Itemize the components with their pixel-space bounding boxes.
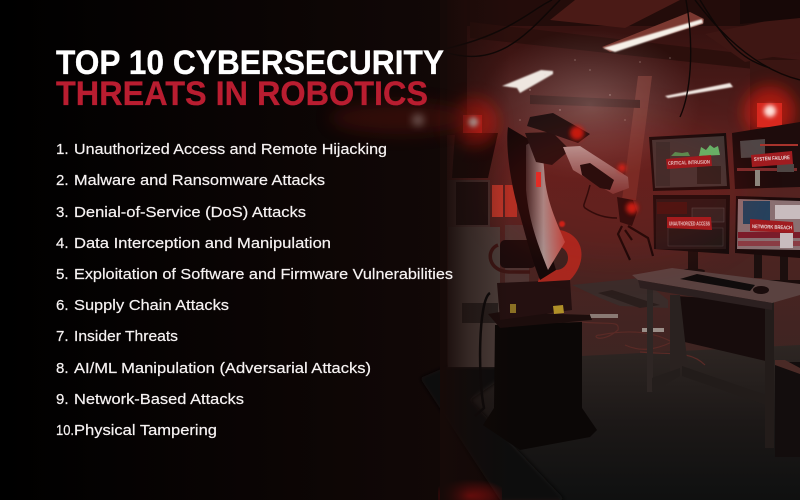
- red ambient glow: [490, 120, 750, 260]
- title line 1: TOP 10 CYBERSECURITY: [56, 44, 444, 82]
- item 2: 2.: [56, 172, 69, 189]
- monitors: [649, 122, 800, 287]
- item 2: Malware and Ransomware Attacks: [74, 172, 325, 189]
- item 1: Unauthorized Access and Remote Hijacking: [74, 141, 387, 158]
- pedestal: [483, 312, 597, 450]
- title: [56, 44, 444, 113]
- ceiling beams: [447, 0, 800, 200]
- item 6: Supply Chain Attacks: [74, 297, 229, 314]
- cables: [440, 0, 800, 117]
- cable: [475, 293, 490, 416]
- item 10: 10.: [56, 422, 74, 439]
- haze: [480, 30, 700, 180]
- monitor: system failure: [732, 122, 800, 189]
- item 4: Data Interception and Manipulation: [74, 235, 331, 252]
- wall panels left of robot: [447, 133, 529, 367]
- item 7: 7.: [56, 328, 69, 345]
- blurred ghost light: [330, 102, 470, 134]
- item 5: Exploitation of Software and Firmware Vulnerabilities: [74, 266, 453, 283]
- motor: [490, 240, 536, 272]
- wrist: [617, 197, 637, 226]
- left fade: [440, 0, 510, 500]
- robot arm: [475, 113, 653, 450]
- monitor: critical intrusion: CRITICAL INTRUSION: [668, 160, 710, 167]
- item 3: 3.: [56, 204, 69, 221]
- item 3: Denial-of-Service (DoS) Attacks: [74, 204, 306, 221]
- item 1: 1.: [56, 141, 69, 158]
- dust: [519, 57, 671, 121]
- item 9: Network-Based Attacks: [74, 391, 244, 408]
- monitor: unauthorized access: UNAUTHORIZED ACCESS: [669, 222, 710, 228]
- upper arm: [563, 146, 629, 194]
- desk: [632, 268, 800, 457]
- item 9: 9.: [56, 391, 69, 408]
- arm hose: [584, 185, 617, 218]
- item 6: 6.: [56, 297, 69, 314]
- item 7: Insider Threats: [74, 328, 178, 345]
- floor edge: [420, 366, 565, 500]
- red beacons: [449, 86, 796, 146]
- elbow joint: [538, 230, 581, 282]
- item 5: 5.: [56, 266, 69, 283]
- threat list: [56, 141, 453, 439]
- monitor stands: [681, 250, 800, 287]
- item 10: Physical Tampering: [74, 422, 217, 439]
- monitor: system failure: SYSTEM FAILURE: [754, 155, 790, 163]
- base: [497, 280, 572, 320]
- gripper: [618, 226, 653, 260]
- fluorescent lights: [502, 12, 733, 98]
- monitor: network breach: [735, 196, 800, 258]
- item 8: 8.: [56, 360, 69, 377]
- head: [527, 113, 590, 143]
- monitor: critical intrusion: [649, 133, 730, 191]
- cables on floor: [582, 322, 705, 365]
- lower arm: [507, 127, 565, 280]
- red glow bottom: [438, 472, 502, 500]
- shoulder: [525, 132, 570, 165]
- item 8: AI/ML Manipulation (Adversarial Attacks): [74, 360, 371, 377]
- item 4: 4.: [56, 235, 69, 252]
- monitor: unauthorized access: [653, 195, 730, 254]
- title line 2: THREATS IN ROBOTICS: [56, 75, 428, 113]
- debris: [572, 278, 668, 332]
